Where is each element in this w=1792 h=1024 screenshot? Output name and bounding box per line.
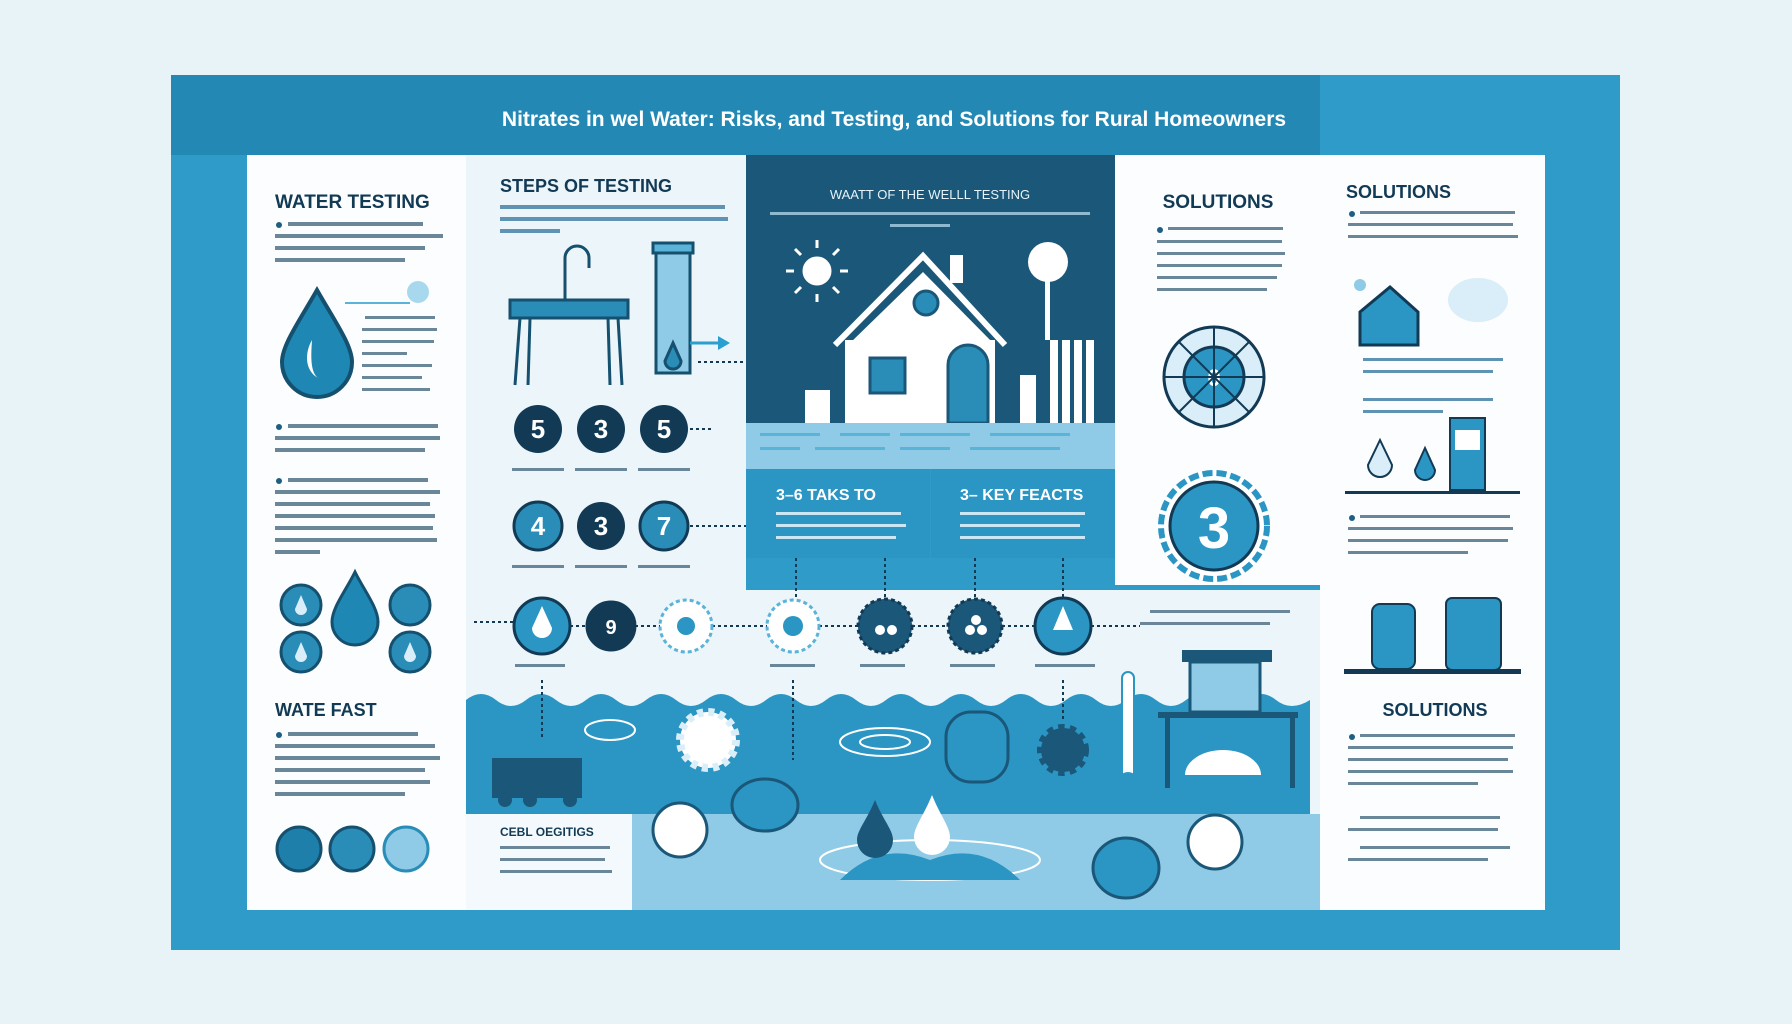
text block 2 bbox=[275, 424, 440, 554]
icon: large drop bbox=[282, 290, 352, 397]
heading: wate fast: WATE FAST bbox=[275, 700, 377, 720]
heading: solutions 3: SOLUTIONS bbox=[1382, 700, 1488, 720]
number circles: 3 bbox=[594, 414, 608, 444]
panel: key facts boxes: 3– KEY FEACTS bbox=[960, 487, 1084, 504]
number circles: 5 bbox=[657, 414, 671, 444]
icon: house and cloud bbox=[1354, 278, 1508, 345]
frame bbox=[171, 75, 1620, 950]
text block bbox=[275, 222, 443, 262]
icon: thermometer bbox=[1118, 672, 1138, 792]
icon: wheel: 0 bbox=[1207, 365, 1221, 392]
panel: key facts boxes: 3–6 TAKS TO bbox=[776, 487, 876, 504]
number circles: 3 bbox=[594, 511, 608, 541]
icon: water jugs bbox=[1345, 598, 1520, 673]
heading: water testing: WATER TESTING bbox=[275, 192, 430, 213]
icon: truck bbox=[492, 758, 582, 807]
panel: solutions col4 bbox=[1115, 155, 1320, 585]
icon: big 3: 3 bbox=[1198, 496, 1230, 561]
callout badges bbox=[653, 712, 1242, 898]
icon: sink and filter bbox=[510, 243, 720, 385]
panel: water testing bbox=[247, 155, 466, 910]
water stripes bbox=[746, 423, 1115, 469]
icon: pond circles bbox=[585, 720, 930, 756]
text block bbox=[500, 205, 728, 233]
title: Nitrates in wel Water: Risks, and Testing, and Solutions for Rural Homeowners bbox=[502, 108, 1286, 131]
icon: well shelter bbox=[1158, 650, 1298, 788]
bottom scene: CEBL OEGITIGS bbox=[500, 825, 594, 839]
icon: three circles bbox=[277, 827, 428, 871]
icon: sun bbox=[786, 240, 848, 302]
number circles: 4 bbox=[531, 511, 546, 541]
icon: gear bbox=[680, 712, 1085, 772]
callout bbox=[345, 281, 437, 391]
panel: steps of testing bbox=[466, 155, 746, 910]
text block 3 bbox=[275, 732, 440, 796]
icon: wheel bbox=[1164, 327, 1264, 427]
heading: SOLUTIONS bbox=[1163, 192, 1273, 213]
icon row: 9 bbox=[605, 617, 617, 639]
panel: solutions col5: SOLUTIONS bbox=[1346, 182, 1451, 202]
icon: drops and filter bbox=[1345, 418, 1520, 494]
number circles: 5 bbox=[531, 414, 545, 444]
bottom scene bbox=[466, 590, 1320, 910]
number circles: 7 bbox=[657, 511, 671, 541]
icon: drop grid bbox=[281, 572, 430, 672]
number circles bbox=[514, 405, 688, 550]
heading: WAATT OF THE WELLL TESTING bbox=[830, 187, 1030, 202]
icon: big 3 bbox=[1161, 473, 1267, 579]
connectors bbox=[474, 558, 1140, 760]
icon: tree and fence bbox=[805, 242, 1094, 423]
icon row bbox=[514, 598, 1091, 654]
panel: solutions col5 bbox=[1320, 155, 1545, 910]
panel: key facts boxes bbox=[746, 469, 1115, 558]
icon: drops in pond bbox=[820, 795, 1040, 880]
icon: house bbox=[835, 255, 1005, 423]
panel: well testing bbox=[746, 155, 1115, 469]
heading: steps: STEPS OF TESTING bbox=[500, 176, 672, 196]
